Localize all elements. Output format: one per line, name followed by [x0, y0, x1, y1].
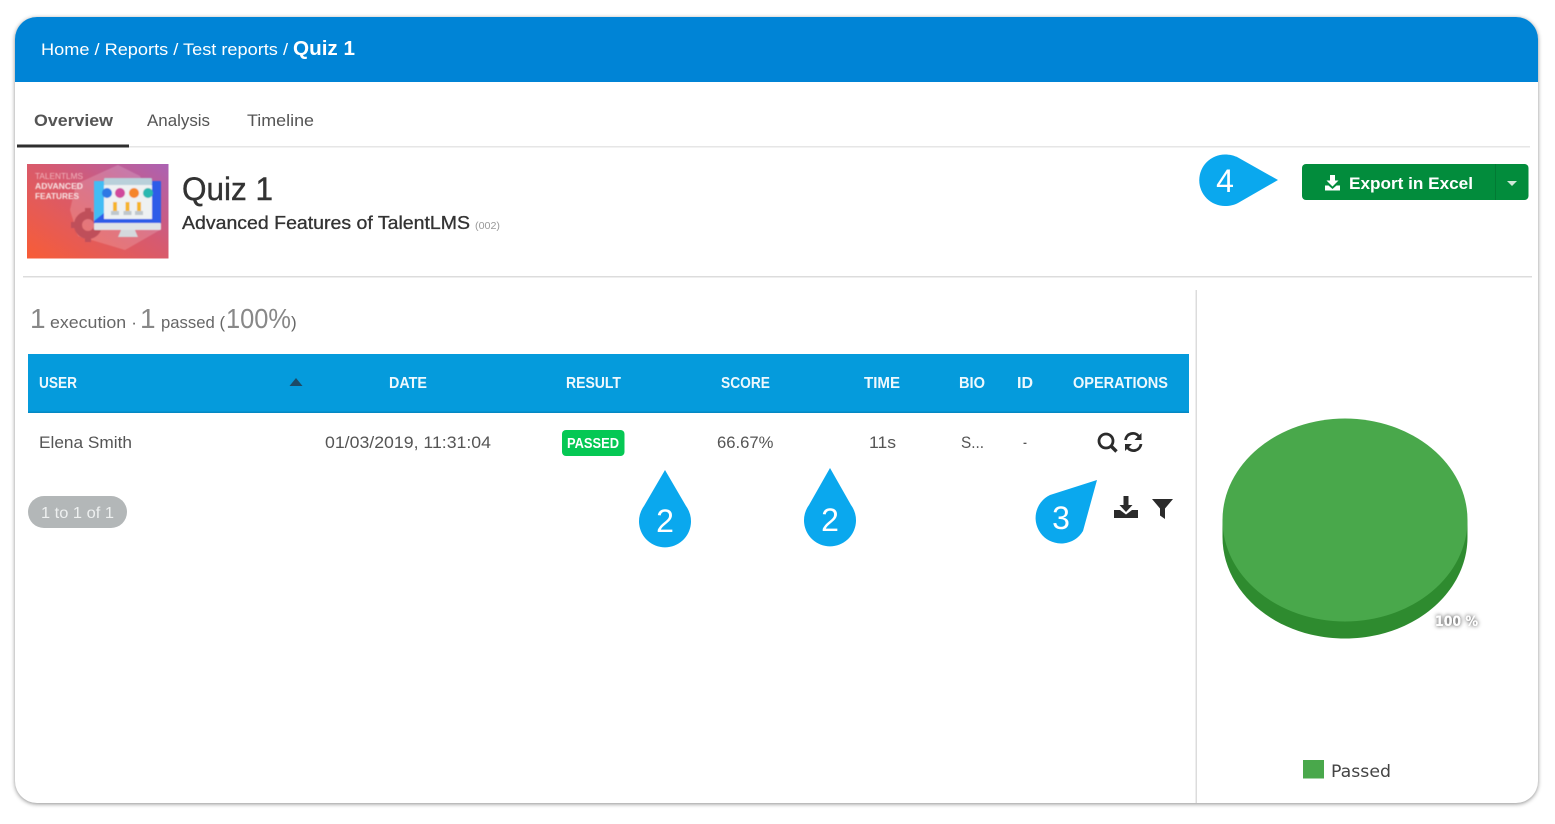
- header bar: [15, 17, 1538, 82]
- breadcrumb: Home / Reports / Test reports /: [41, 40, 288, 59]
- callout 2 result: [639, 470, 691, 547]
- summary stats: passed (: [161, 313, 225, 332]
- tabs: Timeline: [247, 111, 314, 130]
- summary stats: 1: [140, 303, 156, 334]
- tabs: [17, 111, 1530, 148]
- table row: [39, 430, 1142, 456]
- monitor: [94, 178, 161, 237]
- table header: USER: [39, 375, 77, 392]
- callout 2 score: 2: [821, 502, 839, 538]
- quiz heading: [182, 171, 500, 233]
- download icon: [1325, 175, 1340, 190]
- export button: [1302, 164, 1528, 200]
- course thumbnail: FEATURES: [35, 191, 79, 201]
- quiz heading: Quiz 1: [182, 171, 273, 207]
- callout 2 score: [804, 468, 856, 546]
- course name: Advanced Features of TalentLMS: [182, 213, 470, 233]
- summary stats: [30, 303, 297, 334]
- icon: filter: [1152, 499, 1173, 519]
- course thumbnail: TALENTLMS: [35, 171, 83, 181]
- chart legend: Passed: [1331, 762, 1391, 782]
- table header: TIME: [864, 375, 900, 392]
- table header: DATE: [389, 375, 427, 392]
- callout 2 result: 2: [656, 503, 674, 539]
- table header: SCORE: [721, 375, 770, 392]
- results table: [28, 354, 1189, 456]
- table row: 11s: [869, 433, 896, 452]
- pie chart: [1222, 418, 1478, 638]
- table row: 66.67%: [717, 433, 774, 452]
- table header: OPERATIONS: [1073, 375, 1168, 392]
- breadcrumb: Quiz 1: [293, 38, 355, 60]
- breadcrumb: [41, 38, 355, 60]
- dropdown caret: [1507, 181, 1517, 186]
- summary stats: ): [291, 313, 297, 332]
- table row: Elena Smith: [39, 433, 132, 452]
- table header: BIO: [959, 375, 985, 392]
- chart legend: [1303, 760, 1391, 782]
- table row: -: [1023, 433, 1027, 452]
- callout 3: 3: [1052, 500, 1070, 536]
- pagination pill: [28, 496, 127, 528]
- table row: 01/03/2019, 11:31:04: [325, 433, 491, 452]
- course thumbnail: ADVANCED: [35, 181, 83, 191]
- summary stats: 100%: [226, 303, 291, 334]
- button label: Export in Excel: [1349, 174, 1473, 193]
- passed badge: [562, 430, 624, 456]
- icon: export table: [1114, 496, 1138, 518]
- passed badge: PASSED: [567, 436, 619, 452]
- tabs: Overview: [34, 111, 114, 130]
- tabs: Analysis: [147, 111, 210, 130]
- course thumbnail: [27, 164, 168, 258]
- pagination pill: 1 to 1 of 1: [41, 505, 114, 522]
- gear: [71, 208, 105, 242]
- summary stats: execution ·: [50, 313, 137, 332]
- callout 4: 4: [1216, 163, 1234, 199]
- table header: ID: [1017, 375, 1033, 392]
- table header: [28, 354, 1189, 413]
- table header: RESULT: [566, 375, 621, 392]
- callout 4: [1199, 154, 1278, 206]
- icon: refresh: [1125, 433, 1142, 451]
- callout 3: [1036, 480, 1097, 543]
- course code: (002): [475, 220, 500, 232]
- summary stats: 1: [30, 303, 46, 334]
- pie label: 100 %: [1435, 614, 1478, 630]
- icon: search: [1099, 434, 1116, 452]
- table row: S...: [961, 433, 984, 452]
